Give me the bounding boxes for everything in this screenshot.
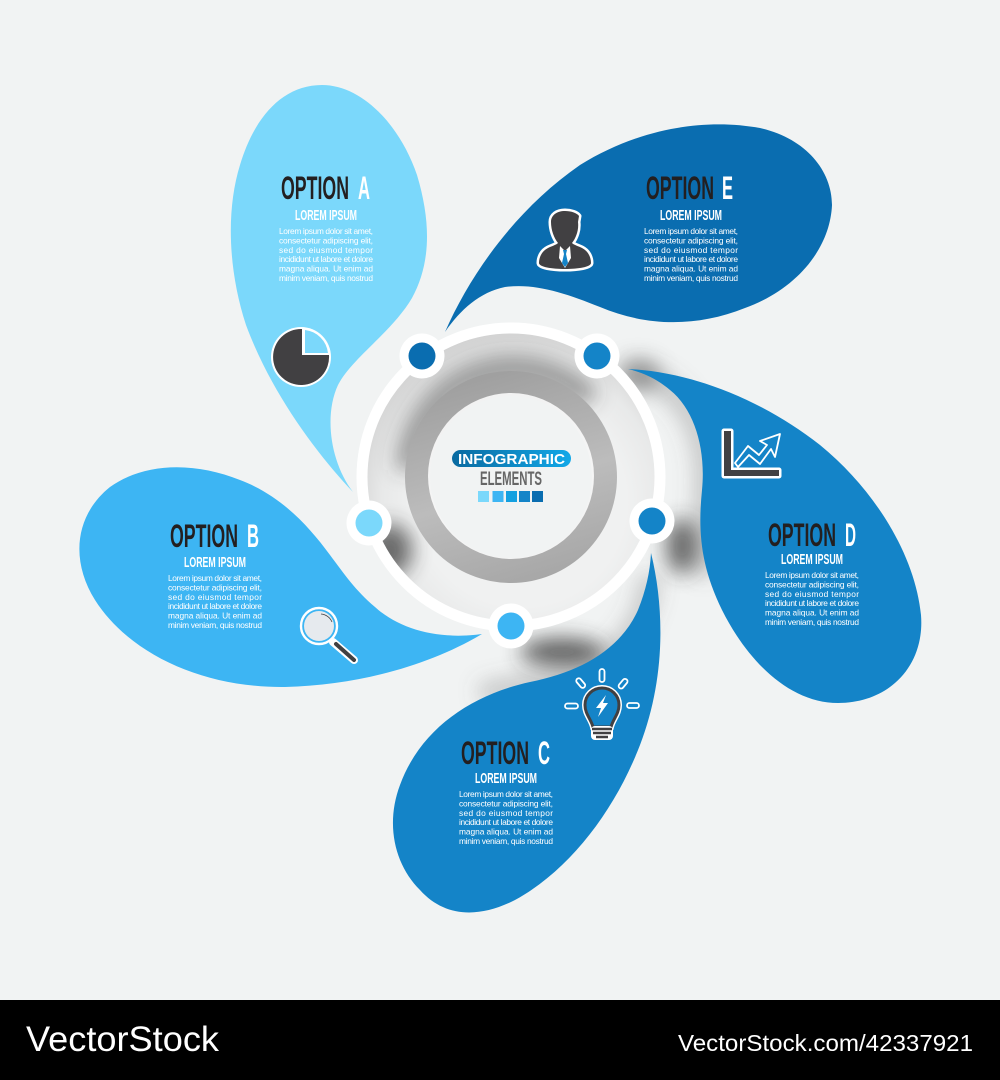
- text: option D: LOREM IPSUM: [781, 552, 843, 568]
- centre label: [452, 450, 571, 502]
- petal: option A: [231, 85, 427, 492]
- footer logo: VectorStock: [26, 1020, 220, 1059]
- text: option C: LOREM IPSUM: [475, 771, 537, 787]
- text: option A: magna aliqua. Ut enim ad: [279, 264, 373, 274]
- text: option D: magna aliqua. Ut enim ad: [765, 608, 859, 618]
- text: option B: minim veniam, quis nostrud: [168, 620, 262, 630]
- text: option E: magna aliqua. Ut enim ad: [644, 264, 738, 274]
- text: option D: incididunt ut labore et dolore: [765, 598, 859, 608]
- text: option C: magna aliqua. Ut enim ad: [459, 826, 553, 836]
- text: option A: sed do eiusmod tempor: [279, 245, 373, 255]
- text: option C: sed do eiusmod tempor: [459, 808, 553, 818]
- petal: option D: [628, 369, 921, 703]
- icon: growth chart: [724, 431, 780, 476]
- text: option E: LOREM IPSUM: [660, 208, 722, 224]
- colour swatches: [478, 491, 543, 502]
- footer bar: [0, 1000, 1000, 1080]
- text: option A: incididunt ut labore et dolore: [279, 254, 373, 264]
- text: option D: consectetur adipiscing elit,: [765, 580, 859, 590]
- text: option B: magna aliqua. Ut enim ad: [168, 610, 262, 620]
- white outer ring: [362, 328, 660, 626]
- text: option A: minim veniam, quis nostrud: [279, 273, 373, 283]
- inner plate: [365, 331, 657, 623]
- node C: [488, 604, 534, 648]
- text: option A: [279, 170, 373, 283]
- text: option B: Lorem ipsum dolor sit amet,: [168, 573, 262, 583]
- petal: option E: [445, 124, 832, 332]
- text: option B: incididunt ut labore et dolore: [168, 601, 262, 611]
- text: option B: [168, 518, 262, 630]
- grey inner ring: [405, 371, 617, 583]
- elements word: ELEMENTS: [480, 469, 542, 490]
- footer id: VectorStock.com/42337921: [678, 1030, 973, 1056]
- text: option D: OPTION: [768, 517, 836, 553]
- text: option A: Lorem ipsum dolor sit amet,: [279, 226, 373, 236]
- text: option D: Lorem ipsum dolor sit amet,: [765, 570, 859, 580]
- centre disc: [428, 393, 594, 559]
- text: option C: consectetur adipiscing elit,: [459, 798, 553, 808]
- text: option E: sed do eiusmod tempor: [644, 245, 738, 255]
- text: option E: OPTION: [646, 170, 714, 206]
- text: option B: LOREM IPSUM: [184, 555, 246, 571]
- text: option A: A: [358, 170, 370, 206]
- node E: [574, 334, 620, 378]
- text: option C: [459, 735, 553, 846]
- node A: [400, 334, 444, 378]
- node B: [346, 500, 392, 546]
- icon: businessman: [539, 211, 591, 269]
- petal: option B: [79, 467, 482, 687]
- text: option D: sed do eiusmod tempor: [765, 589, 859, 599]
- icon: pie chart: [271, 327, 331, 387]
- text: option E: minim veniam, quis nostrud: [644, 273, 738, 283]
- text: option A: OPTION: [281, 170, 349, 206]
- text: option E: E: [722, 170, 733, 206]
- text: option C: OPTION: [461, 735, 529, 771]
- main circle: [362, 328, 660, 626]
- text: option B: OPTION: [170, 518, 238, 554]
- text: option E: Lorem ipsum dolor sit amet,: [644, 226, 738, 236]
- text: option D: D: [845, 517, 856, 553]
- text: option C: minim veniam, quis nostrud: [459, 836, 553, 846]
- text: option A: LOREM IPSUM: [295, 208, 357, 224]
- icon: light bulb: [565, 669, 639, 740]
- text: option E: incididunt ut labore et dolore: [644, 254, 738, 264]
- text: option C: incididunt ut labore et dolore: [459, 817, 553, 827]
- text: option D: minim veniam, quis nostrud: [765, 617, 859, 627]
- petal: option C: [393, 553, 660, 912]
- swirl shadows: [480, 359, 706, 694]
- text: option A: consectetur adipiscing elit,: [279, 236, 373, 246]
- text: option E: consectetur adipiscing elit,: [644, 236, 738, 246]
- text: option B: B: [247, 518, 259, 554]
- text: option E: [644, 170, 738, 283]
- text: option B: consectetur adipiscing elit,: [168, 582, 262, 592]
- text: option D: [765, 517, 859, 627]
- text: option C: C: [538, 735, 550, 771]
- text: option B: sed do eiusmod tempor: [168, 592, 262, 602]
- icon: magnifier: [301, 608, 354, 660]
- plate shading: [368, 368, 590, 576]
- text: option C: Lorem ipsum dolor sit amet,: [459, 789, 553, 799]
- centre disc face: [430, 396, 592, 558]
- infographic pill: INFOGRAPHIC: [458, 451, 565, 468]
- node D: [630, 498, 674, 544]
